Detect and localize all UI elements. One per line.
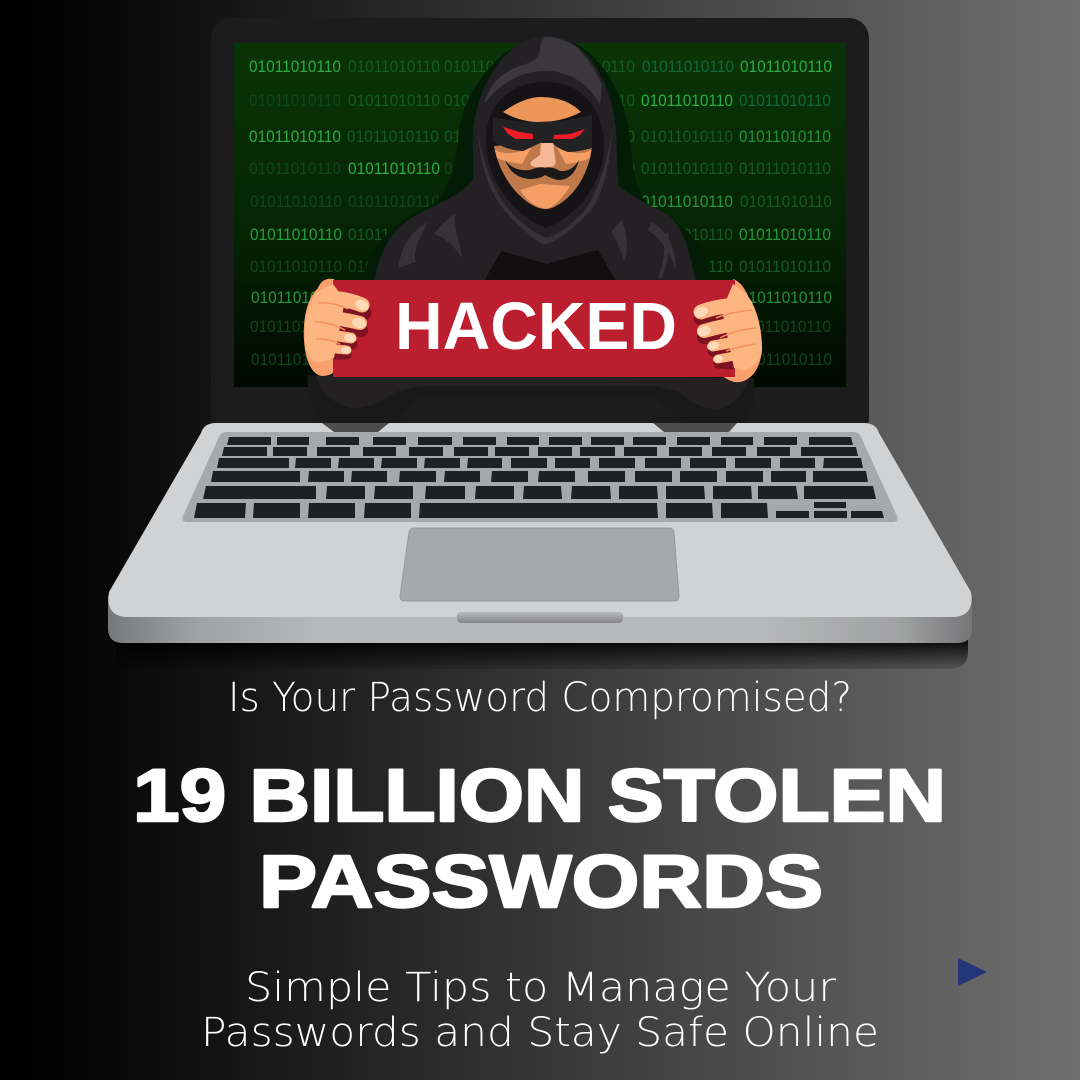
right finger creases xyxy=(716,310,756,351)
keyboard well xyxy=(182,432,898,522)
binary code background: 01011010110 xyxy=(249,160,341,178)
left hand xyxy=(305,284,370,362)
binary code background: 01011010110 xyxy=(543,128,635,146)
tips text: Simple Tips to Manage Your xyxy=(245,965,837,1011)
right fingers xyxy=(701,305,748,359)
binary code background: 01011010110 xyxy=(739,318,831,336)
hacker hood xyxy=(468,36,626,264)
binary code background: 01011010110 xyxy=(543,58,635,76)
left hand back xyxy=(304,279,334,376)
laptop shadow xyxy=(116,640,968,669)
right nails xyxy=(693,305,724,363)
hacker nose xyxy=(530,143,556,167)
binary code background: 01011010110 xyxy=(250,226,342,244)
right finger shadows xyxy=(701,318,732,365)
binary code background: 01011010110 xyxy=(250,318,342,336)
hacker mask xyxy=(493,115,592,152)
binary code background: 01011010110 xyxy=(740,58,832,76)
binary code background: 01011010110 xyxy=(740,351,832,369)
binary code background: 01011010110 xyxy=(348,193,440,211)
hacker chin light xyxy=(520,184,570,209)
subtitle: question: Is Your Password Compromised? xyxy=(228,675,852,721)
binary code background: 01011010110 xyxy=(739,258,831,276)
left palm xyxy=(305,284,345,362)
keyboard keys xyxy=(194,437,884,518)
laptop base front edge xyxy=(108,596,972,643)
binary code background: 01011010110 xyxy=(348,58,440,76)
binary code background: 01011010110 xyxy=(739,92,831,110)
binary code background: 01011010110 xyxy=(642,58,734,76)
binary code background: 01011010110 xyxy=(250,258,342,276)
binary code background: 01011010110 xyxy=(348,92,440,110)
hacker inner torso below sign xyxy=(316,376,748,410)
binary code background: 01011010110 xyxy=(739,160,831,178)
hacker moustache xyxy=(505,160,579,180)
hacker hood fold lines xyxy=(478,130,612,245)
binary code background: 01011010110 xyxy=(251,289,343,307)
binary code background: 01011010110 xyxy=(641,128,733,146)
binary code background: 01011010110 xyxy=(348,160,440,178)
binary code background: 01011010110 xyxy=(444,58,536,76)
binary code background: 01011010110 xyxy=(641,193,733,211)
binary code background: 01011010110 xyxy=(641,92,733,110)
hacker shoulder folds xyxy=(398,212,676,278)
binary code background: 01011010110 xyxy=(740,193,832,211)
binary code background: 01011010110 xyxy=(444,92,536,110)
sign xyxy=(333,280,735,377)
binary code background: 01011010110 xyxy=(348,258,440,276)
binary code background: 01011010110 xyxy=(249,58,341,76)
hacker shoulders xyxy=(374,176,696,282)
binary code background xyxy=(249,58,832,369)
binary code background: 01011010110 xyxy=(739,226,831,244)
laptop deck xyxy=(108,423,972,617)
laptop lid xyxy=(211,18,869,438)
hacker hood highlights xyxy=(484,37,602,104)
binary code background: 01011010110 xyxy=(347,128,439,146)
right hand back xyxy=(722,279,762,382)
binary code background: 01011010110 xyxy=(444,160,536,178)
binary code background: 01011010110 xyxy=(641,226,733,244)
hacker eye left xyxy=(503,127,533,139)
title: PASSWORDS xyxy=(259,840,823,923)
binary code background: 01011010110 xyxy=(249,128,341,146)
hacker halo outline xyxy=(360,43,712,387)
binary code background: 01011010110 xyxy=(641,258,733,276)
binary code background: 01011010110 xyxy=(348,226,440,244)
HACKED text: HACKED xyxy=(395,289,677,364)
left finger shadows xyxy=(335,311,364,355)
left finger creases xyxy=(315,303,348,344)
hacker lower arms xyxy=(308,375,755,432)
hacker lower face xyxy=(494,142,592,209)
left nails xyxy=(341,298,370,354)
binary code background: 01011010110 xyxy=(250,193,342,211)
hacker eye right xyxy=(553,129,585,139)
tips text xyxy=(201,965,879,1056)
trackpad xyxy=(400,528,679,601)
binary code background: 01011010110 xyxy=(543,92,635,110)
laptop screen xyxy=(234,43,846,387)
hacker arm shadows on deck xyxy=(322,423,737,432)
next arrow icon xyxy=(958,958,987,986)
tips text: Passwords and Stay Safe Online xyxy=(201,1010,879,1056)
hacker hood inner xyxy=(486,82,604,228)
binary code background: 01011010110 xyxy=(740,289,832,307)
right hand xyxy=(693,284,762,370)
title: 19 BILLION STOLEN xyxy=(133,754,946,837)
binary code background: 01011010110 xyxy=(543,160,635,178)
binary code background: 01011010110 xyxy=(739,128,831,146)
hacker figure xyxy=(308,36,755,432)
hacker chest shadow xyxy=(484,250,616,281)
hacker cheek light xyxy=(495,146,591,164)
title xyxy=(133,754,946,923)
right palm xyxy=(722,284,762,370)
binary code background: 01011010110 xyxy=(251,351,343,369)
binary code background: 01011010110 xyxy=(444,128,536,146)
front notch xyxy=(457,612,623,623)
hacker forehead xyxy=(503,97,581,122)
binary code background: 01011010110 xyxy=(641,160,733,178)
binary code background: 01011010110 xyxy=(249,92,341,110)
left fingers xyxy=(320,298,362,350)
